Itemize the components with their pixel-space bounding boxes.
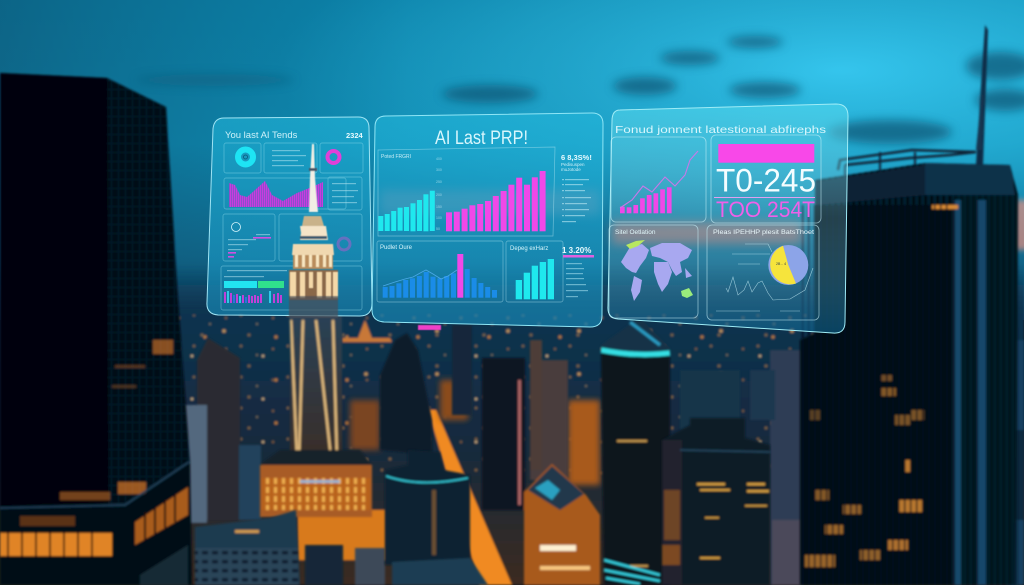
- line and bar chart: [620, 151, 698, 213]
- tower: central shaft and base: [260, 315, 372, 517]
- axis labels: 400: [436, 157, 442, 161]
- faint chart donut: [338, 238, 350, 250]
- centre dark lit-band tower: [601, 319, 670, 585]
- pie chart: 2B .. 4: [776, 262, 786, 266]
- axis labels: 200: [436, 193, 442, 197]
- area bars magenta: [229, 181, 323, 207]
- axis labels: 50: [436, 227, 440, 231]
- tower: dark blue slab: [239, 445, 261, 520]
- front slate building: [195, 510, 300, 585]
- badge icon: [232, 222, 240, 232]
- pie chart: [768, 245, 808, 285]
- stat list: [566, 263, 588, 297]
- small text list: [224, 150, 358, 277]
- side stat: Pedisuspen: [561, 162, 585, 167]
- mini bars: [224, 291, 282, 303]
- skyline: mid-ground towers: [179, 325, 1024, 585]
- left foreground skyscraper: [0, 73, 192, 585]
- kpi value magenta: TOO 254T: [716, 197, 815, 222]
- tower: orange stepped: [524, 464, 600, 585]
- teal-roofed tower: [385, 450, 488, 585]
- axis labels: 300: [436, 168, 442, 172]
- background: evening sky: [0, 0, 1024, 320]
- axis labels: 250: [436, 180, 442, 184]
- right foreground skyscraper: [800, 25, 1018, 585]
- cyan bars chart: [378, 191, 435, 231]
- mini list highlights: [228, 237, 271, 258]
- axis labels: 100: [436, 216, 442, 220]
- tower: brown left: [197, 338, 240, 520]
- lit windows on tower: [60, 340, 173, 500]
- side stat: 6 8,3S%!: [561, 153, 592, 162]
- foreground small dark blocks: [305, 545, 385, 585]
- trend line: [383, 270, 457, 286]
- progress bars: [224, 281, 284, 288]
- world map: [621, 240, 693, 301]
- podium: [0, 462, 192, 585]
- panel 1: AI trends dashboard: [207, 117, 372, 316]
- tower: pale slab: [179, 405, 207, 523]
- side stat: muJotode: [561, 167, 581, 172]
- stat underline: [563, 255, 594, 258]
- podium lit windows: [0, 516, 112, 556]
- far right block: [1008, 340, 1024, 585]
- clouds: [135, 36, 1024, 144]
- panel 1 year: 2324: [346, 131, 364, 140]
- lit windows: [805, 205, 958, 567]
- panel 3 title: Fonud jonnent latestional abfirephs: [615, 124, 826, 136]
- tower: dark spire: [380, 333, 432, 455]
- far magenta rooftop sign: [418, 325, 441, 330]
- tower: brown beside centre: [530, 360, 568, 480]
- kpi value white: T0-245: [716, 162, 816, 198]
- pie annotations and sparkline: [716, 244, 813, 311]
- sunset reflection: [612, 222, 802, 244]
- building body: [800, 163, 1018, 585]
- spire tower in front of panel 1: [289, 144, 338, 318]
- kpi highlight bar: [718, 144, 814, 163]
- axis labels: 150: [436, 205, 442, 209]
- chart label: Poted FRGRI: [381, 154, 411, 160]
- kpi divider: [714, 197, 815, 198]
- panel 3: global analytics: [608, 104, 848, 333]
- magenta bars chart: [446, 171, 546, 231]
- road glow: [428, 410, 512, 585]
- donut magenta: [328, 151, 340, 163]
- panel 2: AI Last PRP: [372, 113, 603, 327]
- tower: dark with pink stripe: [482, 358, 525, 510]
- donut cyan: [238, 150, 253, 164]
- dark lit tower: [662, 418, 770, 585]
- axis labels: [436, 157, 442, 231]
- blue bars chart: [383, 269, 497, 298]
- chart label: Pudlet Oure: [380, 245, 413, 251]
- panel 2 title: AI Last PRP!: [435, 128, 528, 149]
- side list: [562, 179, 591, 222]
- antenna mast: [976, 25, 988, 165]
- highlighted bar: [457, 254, 463, 298]
- distant city with lights: [0, 265, 1024, 585]
- stat value: 1 3.20%: [562, 246, 591, 255]
- side stat: [561, 153, 592, 172]
- horizon lit building: [342, 320, 392, 342]
- chart label: Depeg exHarz: [510, 246, 548, 252]
- pie label: Pleas IPEHHP plesit BatsThoet: [713, 229, 814, 236]
- dusk blocks behind right: [770, 350, 802, 585]
- roof frame: [838, 150, 976, 170]
- horizon reflection: [380, 190, 600, 215]
- panel 1 title: You last AI Tends: [225, 130, 298, 141]
- cyan small bars chart: [516, 259, 554, 299]
- map label: Sitel Oetlation: [615, 229, 656, 236]
